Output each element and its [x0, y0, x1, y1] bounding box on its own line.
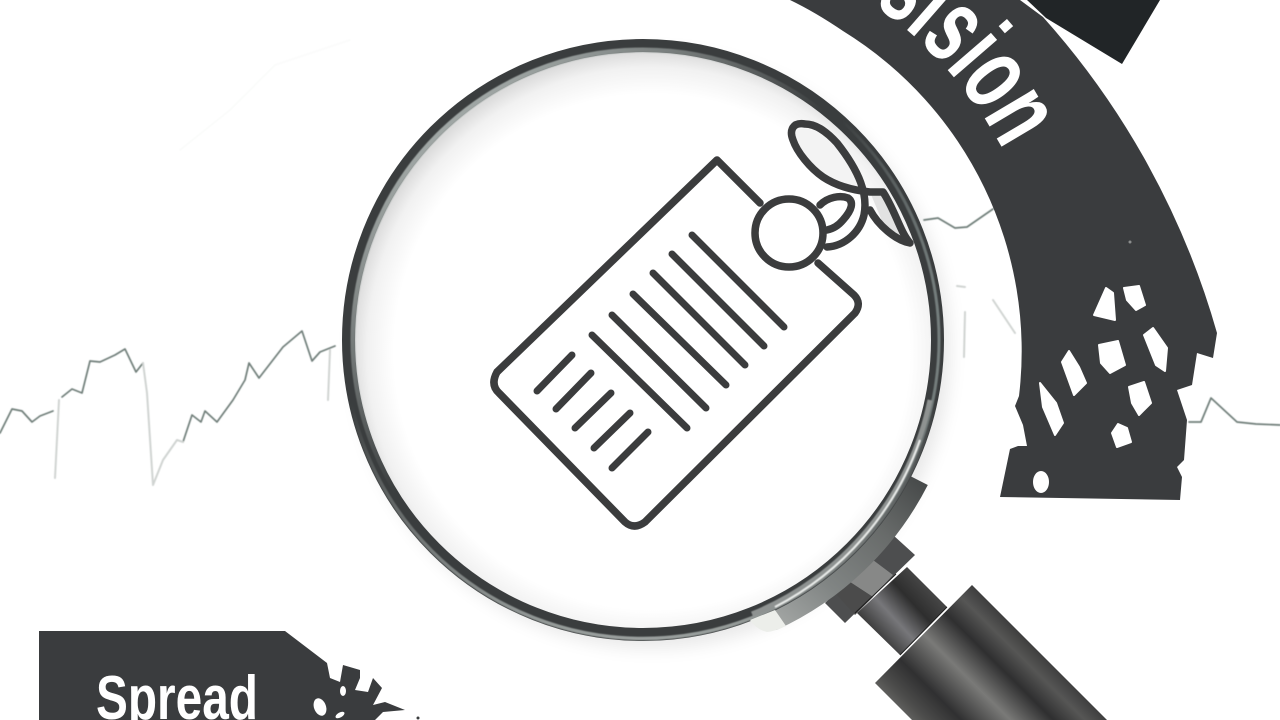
dark corner block — [1027, 0, 1160, 64]
tag string fill — [793, 129, 910, 245]
ring highlights — [344, 42, 942, 638]
chart line: main segments — [0, 209, 1280, 442]
label shape — [39, 631, 405, 720]
label cut-outs — [311, 686, 346, 720]
tag short lines — [537, 355, 648, 468]
chart line: very faint upper trace — [180, 40, 350, 150]
lens soft shadow — [354, 52, 950, 648]
handle neck — [857, 567, 947, 655]
tag long lines — [592, 235, 784, 428]
curved band: sision — [790, 0, 1217, 500]
tag outline — [494, 160, 858, 526]
label: Spread — [39, 631, 420, 720]
bezel highlight — [750, 610, 786, 632]
icon: document tag — [494, 124, 910, 526]
line chart background — [0, 40, 1280, 485]
lens glass — [355, 52, 931, 628]
magnifying glass handle — [825, 535, 1107, 720]
chart line: faint drops — [55, 286, 1015, 485]
handle grip — [875, 585, 1107, 720]
lens bezel — [772, 480, 918, 620]
band cut-outs — [1034, 286, 1167, 492]
lens ring — [344, 42, 942, 638]
tag string — [792, 124, 910, 247]
handle collar — [825, 535, 915, 623]
band shape — [747, 0, 1217, 500]
tag hole — [755, 199, 823, 267]
